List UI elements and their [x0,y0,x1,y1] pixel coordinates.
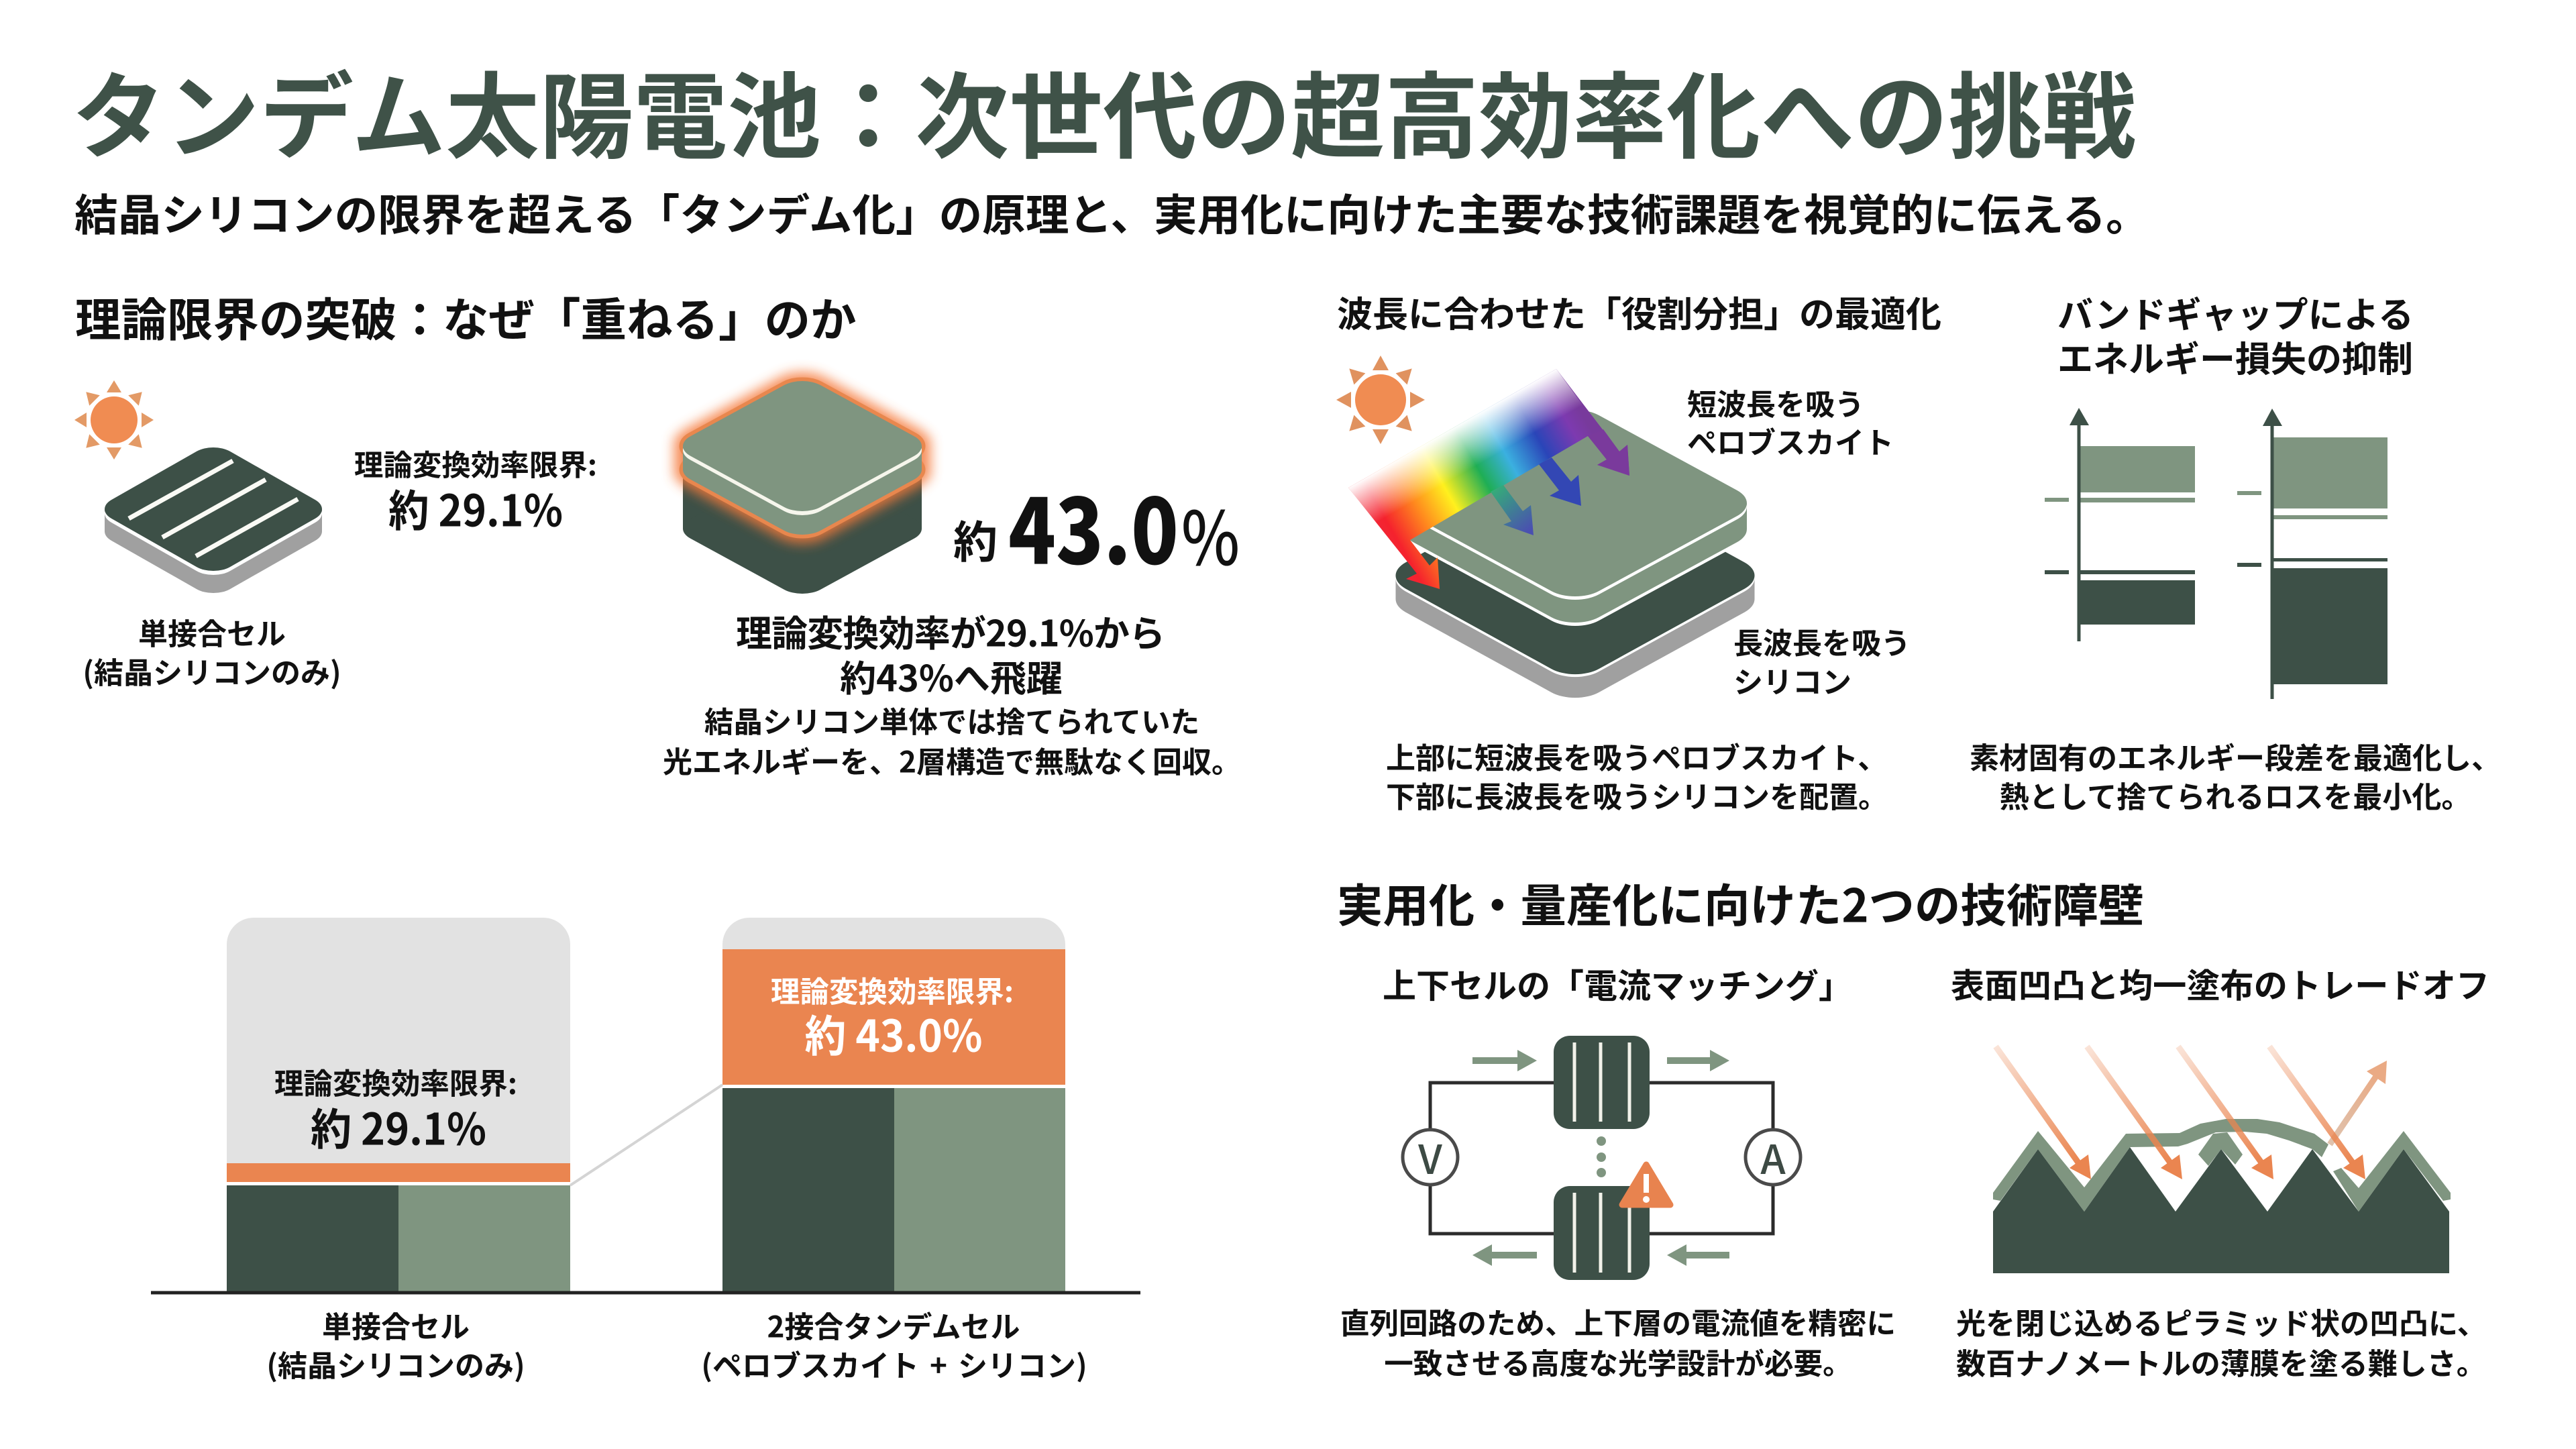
text: efficiency jump: 約43%へ飛躍 [840,649,1063,702]
panel: wavelength roles [1336,286,1941,816]
stat: 43.0 percent: % [1181,479,1240,586]
meter: A: A [1760,1128,1786,1186]
chart: bandgap right [2237,409,2387,699]
meter: A [1746,1128,1801,1186]
subheading: current matching: 上下セルの「電流マッチング」 [1383,959,1852,1008]
coating film [1993,1119,2451,1212]
arrow: blue [1539,458,1581,506]
text: bandgap: 熱として捨てられるロスを最小化。 [2000,773,2471,816]
labels: layers: シリコン [1733,659,1851,702]
label: single junction cell: (結晶シリコンのみ) [83,649,341,692]
diagram: pyramid texture [1993,1046,2451,1273]
arrow: ray 4 [2269,1046,2365,1179]
stat: 43.0 percent: 約 [953,506,998,571]
text: current matching [1340,1300,1896,1383]
text: wavelength roles [1386,735,1888,816]
arrow: ray 1 [1996,1046,2091,1179]
panel: technical barriers [1337,869,2489,1383]
bar: tandem: 理論変換効率限界: [771,969,1014,1011]
orange glow [672,375,932,541]
labels: layers [1687,381,1911,702]
text: current matching: 直列回路のため、上下層の電流値を精密に [1340,1300,1896,1343]
text: efficiency jump: 光エネルギーを、2層構造で無駄なく回収。 [663,739,1241,782]
chart: bandgap left [2045,408,2195,641]
label: limit 29.1 [354,442,597,539]
bar: tandem [722,918,1065,1292]
icon: tandem cell [672,375,932,600]
orange edge [672,375,932,541]
arrow: violet head [1588,429,1629,476]
text: efficiency jump: 結晶シリコン単体では捨てられていた [704,699,1199,741]
labels: layers: 長波長を吸う [1733,620,1911,663]
perovskite layer [672,375,932,541]
heading: bandgap: バンドギャップによる [2057,287,2414,338]
label: limit 29.1: 理論変換効率限界: [354,442,597,484]
bar chart: efficiency limits [151,918,1140,1385]
cell: bottom [1554,1186,1650,1280]
arrows: light [1996,1046,2387,1179]
label: limit 29.1: 約 29.1% [388,476,563,539]
text: current matching: 一致させる高度な光学設計が必要。 [1384,1340,1852,1383]
heading: technical barriers: 実用化・量産化に向けた2つの技術障壁 [1337,869,2144,936]
title: タンデム太陽電池：次世代の超高効率化への挑戦 [72,42,2136,178]
diagram: series circuit [1403,1036,1801,1280]
icon: sun [74,380,154,460]
labels: layers: 短波長を吸う [1687,381,1864,424]
text: texture trade-off: 数百ナノメートルの薄膜を塗る難しさ。 [1956,1340,2486,1383]
arrow: ray 3 [2178,1046,2273,1179]
axis labels: (結晶シリコンのみ) [266,1342,525,1385]
arrow: indigo [1491,485,1534,535]
label: single junction cell: 単接合セル [138,610,286,653]
axis labels: 2接合タンデムセル [767,1303,1020,1346]
bar: single junction: 約 29.1% [311,1094,486,1157]
dark silicon layer [672,446,932,600]
stat: 43.0 percent: 43.0 [1008,460,1179,590]
meter: V: V [1417,1128,1442,1186]
axis labels [266,1303,1087,1385]
text: wavelength roles: 下部に長波長を吸うシリコンを配置。 [1386,773,1888,816]
text: bandgap [1970,735,2501,816]
icon: sun [1336,356,1425,444]
meter: V [1403,1128,1458,1186]
axis labels: (ペロブスカイト + シリコン) [701,1342,1087,1385]
cell: top [1554,1036,1650,1129]
labels: layers: ペロブスカイト [1687,419,1894,462]
bar: single junction: 理論変換効率限界: [274,1061,517,1103]
rainbow light beam [1348,369,1629,589]
text: wavelength roles: 上部に短波長を吸うペロブスカイト、 [1386,735,1887,777]
text: texture trade-off: 光を閉じ込めるピラミッド状の凹凸に、 [1956,1300,2487,1343]
subtitle: 結晶シリコンの限界を超える「タンデム化」の原理と、実用化に向けた主要な技術課題を視覚的に伝える。 [74,180,2149,243]
arrow: reflected [2330,1061,2387,1144]
silicon layer [1382,469,1768,706]
text: bandgap: 素材固有のエネルギー段差を最適化し、 [1970,735,2501,777]
heading: wavelength roles: 波長に合わせた「役割分担」の最適化 [1337,286,1941,337]
label: single junction cell [83,610,341,692]
arrows: current [1472,1050,1729,1266]
bar: single junction [227,918,570,1292]
bar: tandem: 約 43.0% [805,1001,982,1064]
heading: bandgap: エネルギー損失の抑制 [2057,331,2413,382]
panel: bandgap [1970,287,2501,816]
stat: 43.0 percent [953,460,1240,590]
text: efficiency jump: 理論変換効率が29.1%から [736,604,1165,657]
axis labels: 単接合セル [322,1303,470,1346]
perovskite layer [1389,402,1761,633]
panel: theoretical limit [74,284,1241,782]
arrow: ray 2 [2087,1046,2182,1179]
icon: single junction cell [95,442,331,598]
subheading: texture trade-off: 表面凹凸と均一塗布のトレードオフ [1951,959,2489,1008]
heading: bandgap [2057,287,2414,382]
substrate [1993,1147,2449,1273]
text: efficiency jump [663,604,1241,782]
heading: theoretical limit: 理論限界の突破：なぜ「重ねる」のか [75,284,857,350]
text: texture trade-off [1956,1300,2487,1383]
icon: warning [1622,1165,1670,1205]
